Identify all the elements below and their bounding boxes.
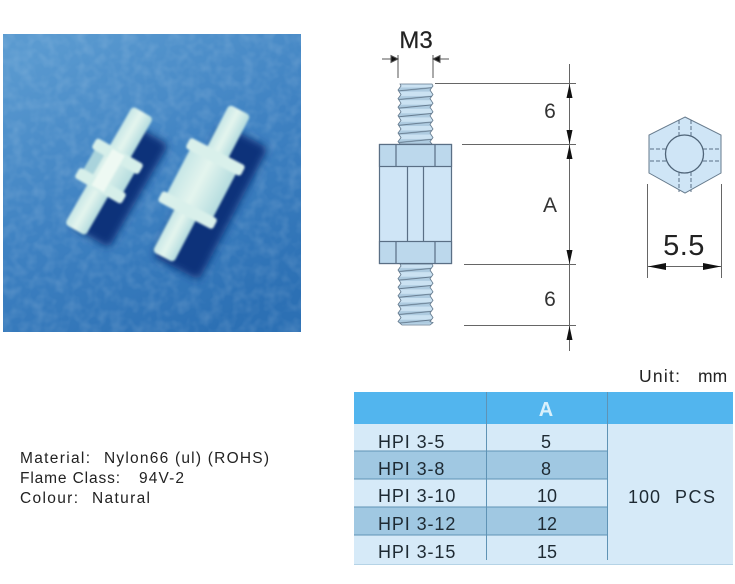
material specifications: [20, 450, 269, 507]
header label A: A: [539, 399, 553, 421]
technical drawing: side view: [380, 27, 576, 351]
table body background: [354, 424, 733, 564]
upper thread: [398, 84, 433, 144]
size table: [354, 392, 733, 564]
slots: [650, 120, 720, 192]
unit label: Unit:: [639, 366, 680, 386]
centre hole: [666, 135, 704, 173]
table header: [354, 392, 733, 424]
material specifications: Nylon66 (ul) (ROHS): [104, 450, 269, 467]
lower thread: [398, 264, 433, 325]
A values: 5: [541, 432, 551, 452]
model names: HPI 3-10: [378, 486, 456, 506]
label 5.5: 5.5: [663, 230, 705, 262]
height dimensions: [435, 64, 576, 351]
label 6 bottom: 6: [544, 288, 556, 311]
product photo: [3, 34, 301, 332]
A values: [537, 432, 557, 562]
model names: HPI 3-5: [378, 432, 445, 452]
model names: HPI 3-12: [378, 514, 456, 534]
width dimension: [647, 184, 722, 278]
quantity: [628, 487, 715, 507]
hex body: [380, 144, 452, 264]
unit label: mm: [698, 366, 727, 386]
M3 width dimension: [382, 55, 449, 78]
unit label: [639, 366, 727, 386]
spacer shadows: [71, 123, 269, 281]
material specifications: Material:: [20, 450, 90, 467]
shaded rows: [354, 451, 607, 479]
material specifications: Colour:: [20, 490, 78, 507]
M3 label: M3: [399, 27, 433, 54]
model names: [378, 432, 456, 562]
quantity: PCS: [675, 487, 715, 507]
A values: 15: [537, 542, 557, 562]
model names: HPI 3-8: [378, 459, 445, 479]
model names: HPI 3-15: [378, 542, 456, 562]
right spacer: [136, 96, 267, 271]
A values: 12: [537, 514, 557, 534]
material specifications: Natural: [92, 490, 150, 507]
material specifications: 94V-2: [139, 470, 184, 487]
label 6 top: 6: [544, 100, 556, 123]
left spacer: [52, 99, 166, 243]
A values: 10: [537, 486, 557, 506]
A values: 8: [541, 459, 551, 479]
technical drawing: hex end view: [647, 117, 722, 278]
quantity: 100: [628, 487, 660, 507]
dimension arrows: [566, 84, 572, 340]
label A: A: [543, 194, 557, 217]
material specifications: Flame Class:: [20, 470, 120, 487]
hexagon: [649, 117, 721, 193]
